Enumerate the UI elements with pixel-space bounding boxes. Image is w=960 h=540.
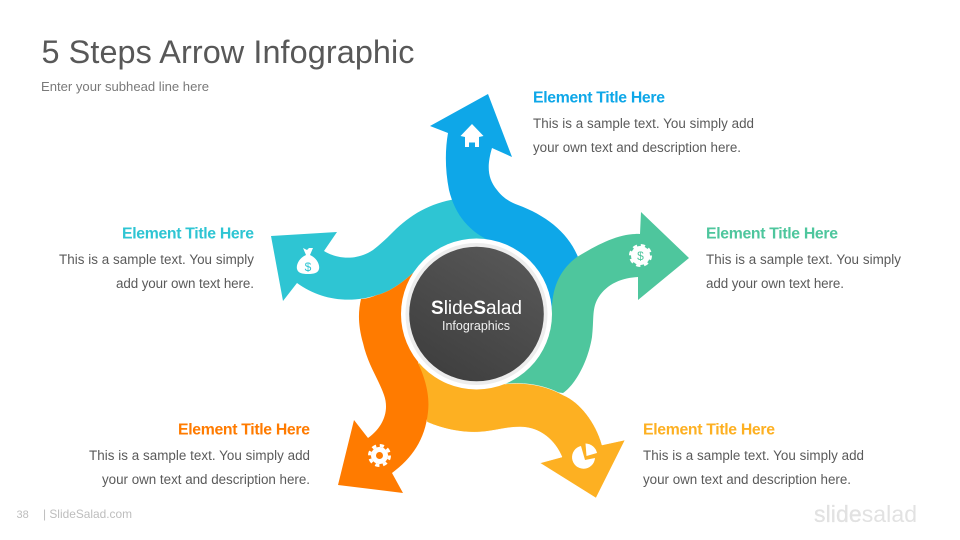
text block: green: This is a sample text. You simply: [706, 252, 901, 267]
arrow: orange: [338, 273, 440, 493]
text block: orange: Element Title Here: [178, 422, 310, 438]
text block: teal: [59, 226, 254, 291]
text block: teal: This is a sample text. You simply: [59, 252, 254, 267]
text block: yellow: your own text and description here.: [643, 472, 851, 487]
text block: green: [706, 226, 901, 291]
text block: orange: [89, 422, 310, 487]
icon: house: [460, 124, 484, 147]
footer site link: | SlideSalad.com: [43, 507, 132, 521]
arrow: blue: [430, 94, 585, 320]
footer page number: 38: [16, 509, 29, 521]
icon: money bag: [297, 248, 319, 274]
text block: blue: Element Title Here: [533, 90, 665, 106]
text block: yellow: Element Title Here: [643, 422, 775, 438]
text block: blue: [533, 90, 754, 155]
text block: teal: Element Title Here: [122, 226, 254, 242]
text block: teal: add your own text here.: [116, 276, 254, 291]
icon: gear with dollar: [630, 246, 650, 266]
text block: blue: your own text and description here.: [533, 140, 741, 155]
icon: money bag: $: [305, 260, 312, 274]
center label: SlideSalad: [431, 298, 522, 319]
subhead: Enter your subhead line here: [41, 79, 209, 94]
icon: gear with dollar: $: [637, 249, 644, 263]
text block: green: Element Title Here: [706, 226, 838, 242]
text block: blue: This is a sample text. You simply add: [533, 116, 754, 131]
footer logo: slidesalad: [814, 501, 917, 527]
title: 5 Steps Arrow Infographic: [42, 34, 414, 70]
arrow: teal: [271, 199, 500, 301]
center circle: [401, 238, 552, 390]
text block: orange: your own text and description here.: [102, 472, 310, 487]
icon: gear: [370, 446, 390, 466]
center sublabel: Infographics: [442, 319, 510, 333]
text block: yellow: [643, 422, 864, 487]
text block: green: add your own text here.: [706, 276, 844, 291]
text block: yellow: This is a sample text. You simply add: [643, 448, 864, 463]
icon: pie chart: [572, 444, 597, 469]
arrow: green: [500, 212, 689, 393]
arrow: yellow: [418, 360, 625, 498]
text block: orange: This is a sample text. You simply add: [89, 448, 310, 463]
